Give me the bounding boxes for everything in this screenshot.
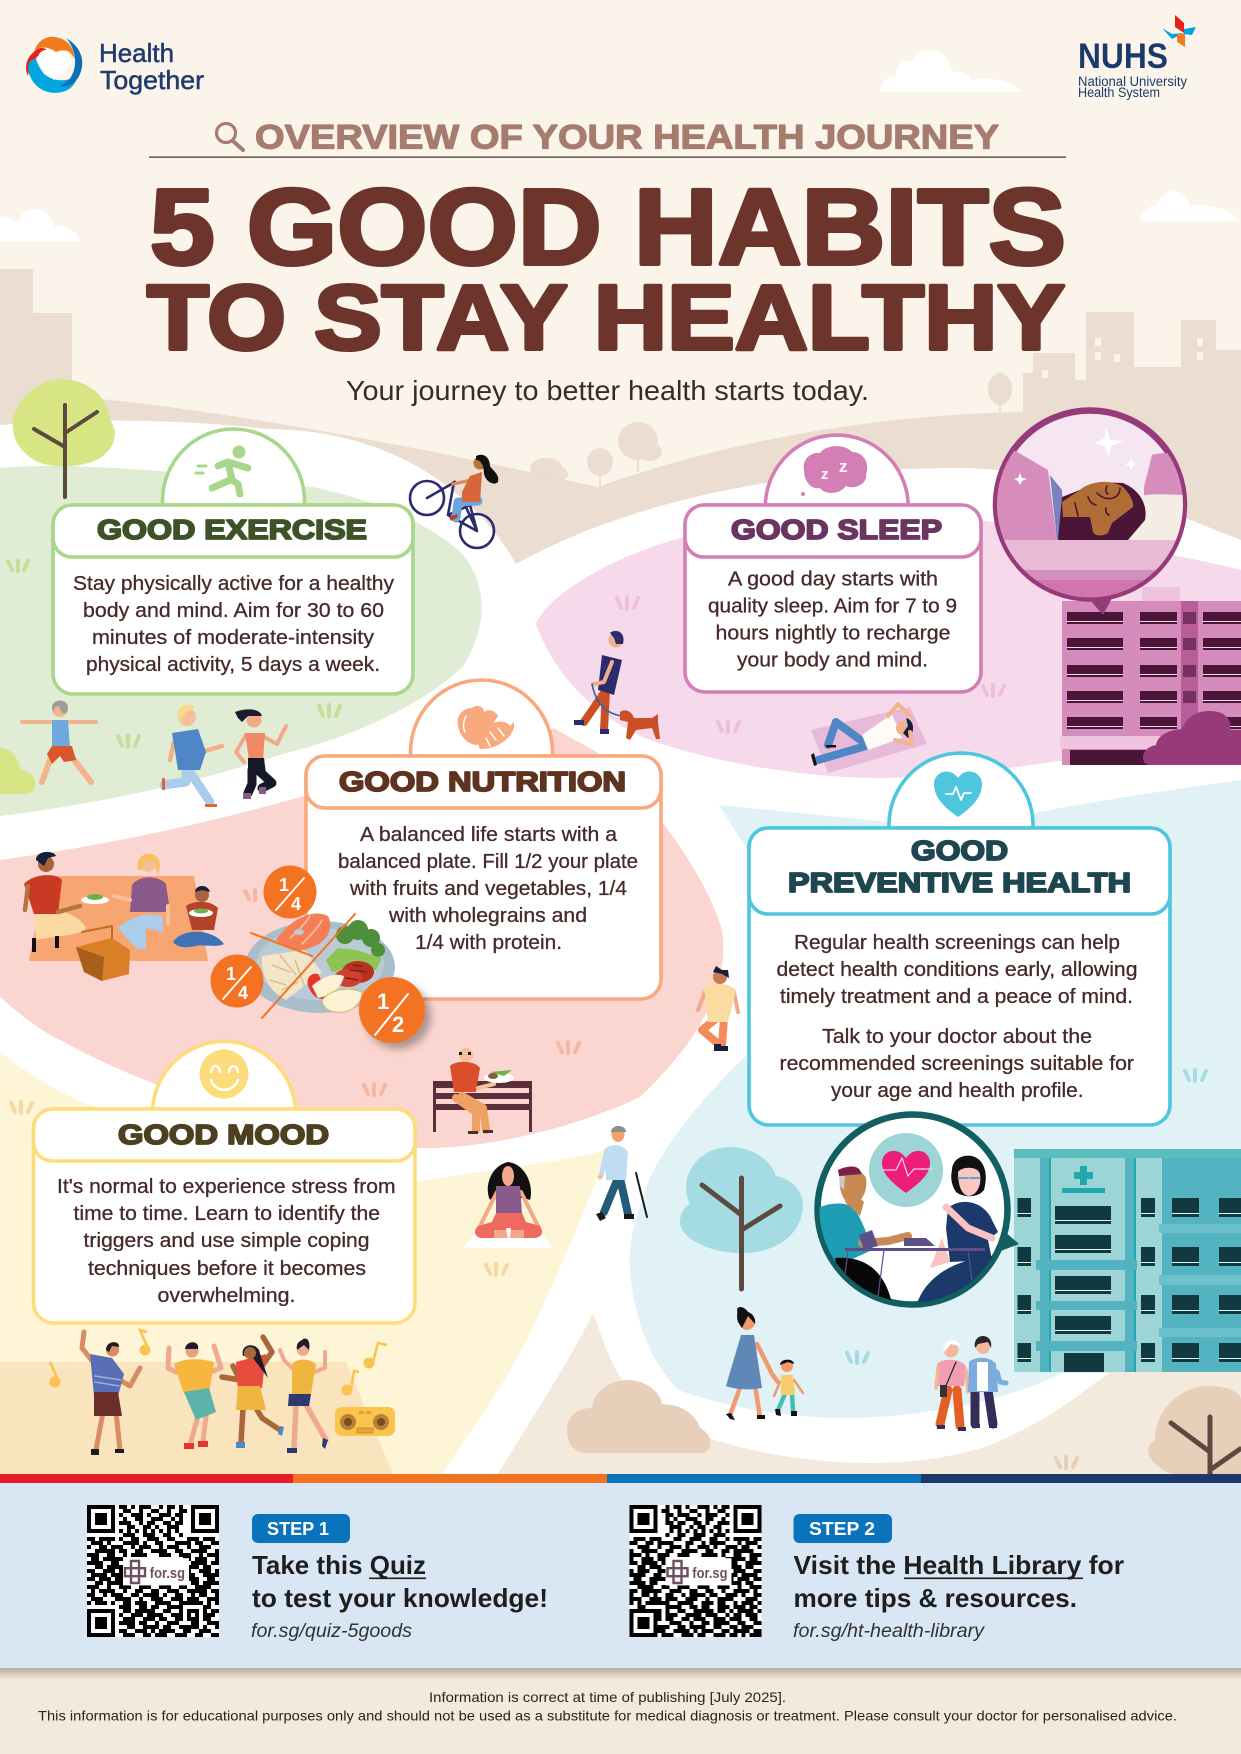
dancer 1 — [82, 1332, 140, 1455]
illustration: picnic basket — [76, 926, 130, 981]
preventive heading: GOOD — [911, 835, 1008, 866]
disclaimer text: Information is correct at time of publishing [July 2025]. — [429, 1689, 786, 1705]
tree: beige bottom right — [1148, 1386, 1241, 1482]
logo: NUHS — [1078, 15, 1196, 100]
badge: one quarter top — [264, 866, 316, 918]
dancer 4 — [280, 1338, 328, 1453]
icons: music notes — [50, 1330, 387, 1395]
panel: good preventive health — [749, 753, 1170, 1125]
badge: one quarter top: 4 — [291, 894, 301, 914]
illustration: yoga woman — [22, 700, 96, 782]
region: salmon nutrition area — [0, 728, 723, 1148]
illustration: jogging woman — [235, 709, 286, 799]
background: beige hill band — [0, 380, 1241, 564]
disclaimer text: This information is for educational purposes only and should not be used as a substitute for medical diagnosis or treatment. Please consult your doctor for personalised advice. — [38, 1708, 1177, 1724]
mood heading: GOOD MOOD — [118, 1119, 329, 1150]
region: pink sleep area — [536, 520, 1241, 778]
background: white park paths — [0, 420, 1241, 1480]
logo: Health Together — [26, 37, 204, 95]
step 2 call to action — [793, 1514, 1124, 1642]
exercise body text: minutes of moderate-intensity — [92, 626, 375, 649]
background: city skyline — [0, 269, 1241, 420]
illustration: pink hospital building — [1060, 587, 1241, 765]
preventive heading: PREVENTIVE HEALTH — [788, 867, 1131, 898]
mood body text: overwhelming. — [158, 1284, 296, 1307]
badge: one half: 1 — [377, 989, 389, 1014]
region: yellow mood area — [0, 1052, 607, 1474]
nutrition body text: balanced plate. Fill 1/2 your plate — [338, 850, 638, 873]
exercise body text — [73, 572, 395, 676]
mood dome — [153, 1042, 295, 1114]
icon: heart pulse — [934, 771, 982, 817]
title: 5 GOOD HABITS — [150, 166, 1066, 287]
region: beige bottom ground — [498, 1313, 1241, 1474]
exercise body text: body and mind. Aim for 30 to 60 — [83, 599, 384, 622]
illustration: doctor consultation bubble — [815, 1114, 1019, 1310]
preventive dome — [889, 753, 1033, 834]
footer: colour strip — [0, 1474, 1241, 1483]
nutrition card — [306, 756, 661, 999]
logo: Health Together: Together — [100, 65, 204, 95]
panel: good mood — [34, 1042, 415, 1323]
preventive heading — [788, 835, 1131, 898]
mood body text: techniques before it becomes — [88, 1257, 366, 1280]
illustration: dog walker — [574, 631, 660, 740]
illustration: sleeping woman bubble — [985, 410, 1195, 615]
nutrition body text: with fruits and vegetables, 1/4 — [349, 877, 627, 900]
footer: disclaimer background — [0, 1668, 1241, 1754]
QR code: health library — [630, 1505, 762, 1637]
step 2 link: for.sg/ht-health-library — [793, 1621, 986, 1642]
step 2 text: Visit the Health Library for — [794, 1550, 1124, 1580]
grass tufts — [8, 561, 1206, 1468]
illustration: blue tree — [680, 1147, 803, 1289]
disclaimer text — [38, 1689, 1177, 1724]
bubble circle — [996, 410, 1184, 598]
logo: NUHS: Health System — [1078, 85, 1160, 100]
mood header — [34, 1109, 415, 1161]
step 1 call to action — [251, 1514, 548, 1642]
panel: good sleep — [685, 435, 981, 692]
illustration: hospital building — [1014, 1149, 1241, 1372]
icon: smile — [200, 1050, 248, 1098]
nutrition dome — [410, 680, 552, 762]
region: tan ground — [0, 1362, 393, 1474]
mood body text: It's normal to experience stress from — [57, 1175, 396, 1198]
icon: sleep cloud: z — [839, 457, 848, 476]
illustration: meditating woman — [463, 1162, 553, 1248]
overline heading: OVERVIEW OF YOUR HEALTH JOURNEY — [255, 118, 999, 156]
preventive body text: timely treatment and a peace of mind. — [780, 985, 1133, 1008]
bush: green left — [0, 748, 35, 794]
exercise header — [53, 505, 413, 557]
panel: good exercise — [53, 429, 413, 694]
mood card — [34, 1109, 415, 1323]
QR code: quiz: for.sg — [150, 1566, 185, 1582]
QR code: health library: for.sg — [692, 1566, 728, 1582]
step 2 badge: STEP 2 — [809, 1519, 875, 1539]
illustration: cyclist — [410, 455, 498, 548]
sleep body text: hours nightly to recharge — [716, 622, 950, 644]
nutrition body text: with wholegrains and — [388, 904, 587, 927]
tree: green top left — [13, 379, 115, 497]
illustration: elderly couple — [936, 1336, 1006, 1431]
region: light blue preventive area — [630, 780, 1241, 1418]
icon: apple and carrot — [458, 706, 514, 749]
badge: one half: 2 — [392, 1012, 404, 1037]
nutrition header — [306, 756, 661, 808]
preventive body text: detect health conditions early, allowing — [776, 958, 1138, 981]
step 2 call to action: more tips & resources. — [794, 1583, 1077, 1613]
sleep header — [685, 505, 981, 557]
illustration: dancers — [82, 1332, 328, 1455]
panel: good nutrition — [306, 680, 661, 999]
logo: NUHS: National University — [1078, 74, 1187, 89]
sleep body text — [708, 568, 957, 672]
QR code: quiz — [87, 1505, 219, 1637]
step 2 badge — [794, 1514, 892, 1543]
subtitle: Your journey to better health starts today. — [346, 375, 869, 406]
logo: NUHS: NUHS — [1078, 37, 1168, 76]
illustration: running man — [162, 705, 222, 807]
preventive header — [749, 828, 1170, 914]
preventive body text: recommended screenings suitable for — [780, 1052, 1134, 1075]
sleep card — [685, 505, 981, 692]
preventive body text: Regular health screenings can help — [794, 931, 1120, 954]
mood body text — [57, 1175, 396, 1307]
nutrition body text — [338, 823, 638, 954]
step 1 text: Take this Quiz — [252, 1550, 426, 1580]
exercise body text: physical activity, 5 days a week. — [86, 653, 380, 676]
background trees on the hill — [530, 373, 1012, 488]
illustration: bench man — [433, 1048, 532, 1134]
preventive card — [749, 828, 1170, 1125]
sleep body text: quality sleep. Aim for 7 to 9 — [708, 594, 957, 618]
nutrition heading: GOOD NUTRITION — [339, 766, 626, 797]
title — [147, 166, 1066, 369]
badge: one quarter left — [210, 954, 264, 1008]
sleep dome — [766, 435, 908, 510]
step 1 badge — [252, 1514, 350, 1543]
cloud: right — [1140, 191, 1239, 221]
icon: sleep cloud: z — [821, 466, 828, 483]
sleep heading: GOOD SLEEP — [731, 514, 942, 545]
preventive body text: your age and health profile. — [831, 1079, 1084, 1102]
illustration: man on mat — [811, 704, 927, 773]
nutrition body text: 1/4 with protein. — [415, 931, 562, 954]
step 1 call to action: to test your knowledge! — [252, 1583, 548, 1613]
icon: sleep cloud — [801, 446, 867, 496]
logo: Health Together: Health — [99, 38, 174, 68]
exercise card — [53, 505, 413, 694]
cloud: top right — [880, 50, 1021, 92]
bubble circle — [818, 1114, 1008, 1304]
cloud bush: beige bottom — [567, 1380, 711, 1453]
badge: one half — [359, 977, 431, 1049]
bubble pointer — [998, 1226, 1019, 1252]
icon: runner — [196, 446, 248, 494]
illustration: old man with cane — [596, 1126, 647, 1221]
badge: one quarter left: 4 — [238, 983, 248, 1003]
badge: one quarter left: 1 — [226, 964, 236, 984]
badge: one quarter top: 1 — [279, 875, 289, 895]
illustration: walking man yellow shirt — [698, 966, 738, 1051]
mood body text: triggers and use simple coping — [84, 1229, 370, 1252]
preventive body text — [776, 931, 1138, 1102]
nutrition body text: A balanced life starts with a — [360, 823, 618, 846]
illustration: boombox — [335, 1407, 395, 1436]
exercise body text: Stay physically active for a healthy — [73, 572, 395, 595]
cloud: left — [0, 209, 80, 241]
bubble pointer — [1090, 598, 1112, 615]
illustration: picnic family — [24, 852, 224, 961]
sleep body text: A good day starts with — [728, 568, 938, 590]
footer: call to action panel — [0, 1483, 1241, 1668]
preventive body text: Talk to your doctor about the — [822, 1025, 1092, 1048]
background: cream hill — [0, 300, 1023, 487]
exercise dome — [162, 429, 304, 510]
dancer 3 — [222, 1337, 284, 1448]
exercise heading: GOOD EXERCISE — [97, 514, 367, 545]
sleep body text: your body and mind. — [737, 648, 928, 672]
step 1 link: for.sg/quiz-5goods — [251, 1621, 413, 1642]
region: green exercise area — [0, 466, 482, 816]
dancer 2 — [168, 1342, 221, 1449]
illustration: balanced plate — [245, 913, 395, 1018]
icon: magnifying glass — [216, 124, 243, 150]
title: TO STAY HEALTHY — [147, 267, 1065, 369]
illustration: mother and child — [726, 1307, 803, 1420]
step 1 badge: STEP 1 — [267, 1519, 329, 1539]
mood body text: time to time. Learn to identify the — [74, 1202, 380, 1225]
